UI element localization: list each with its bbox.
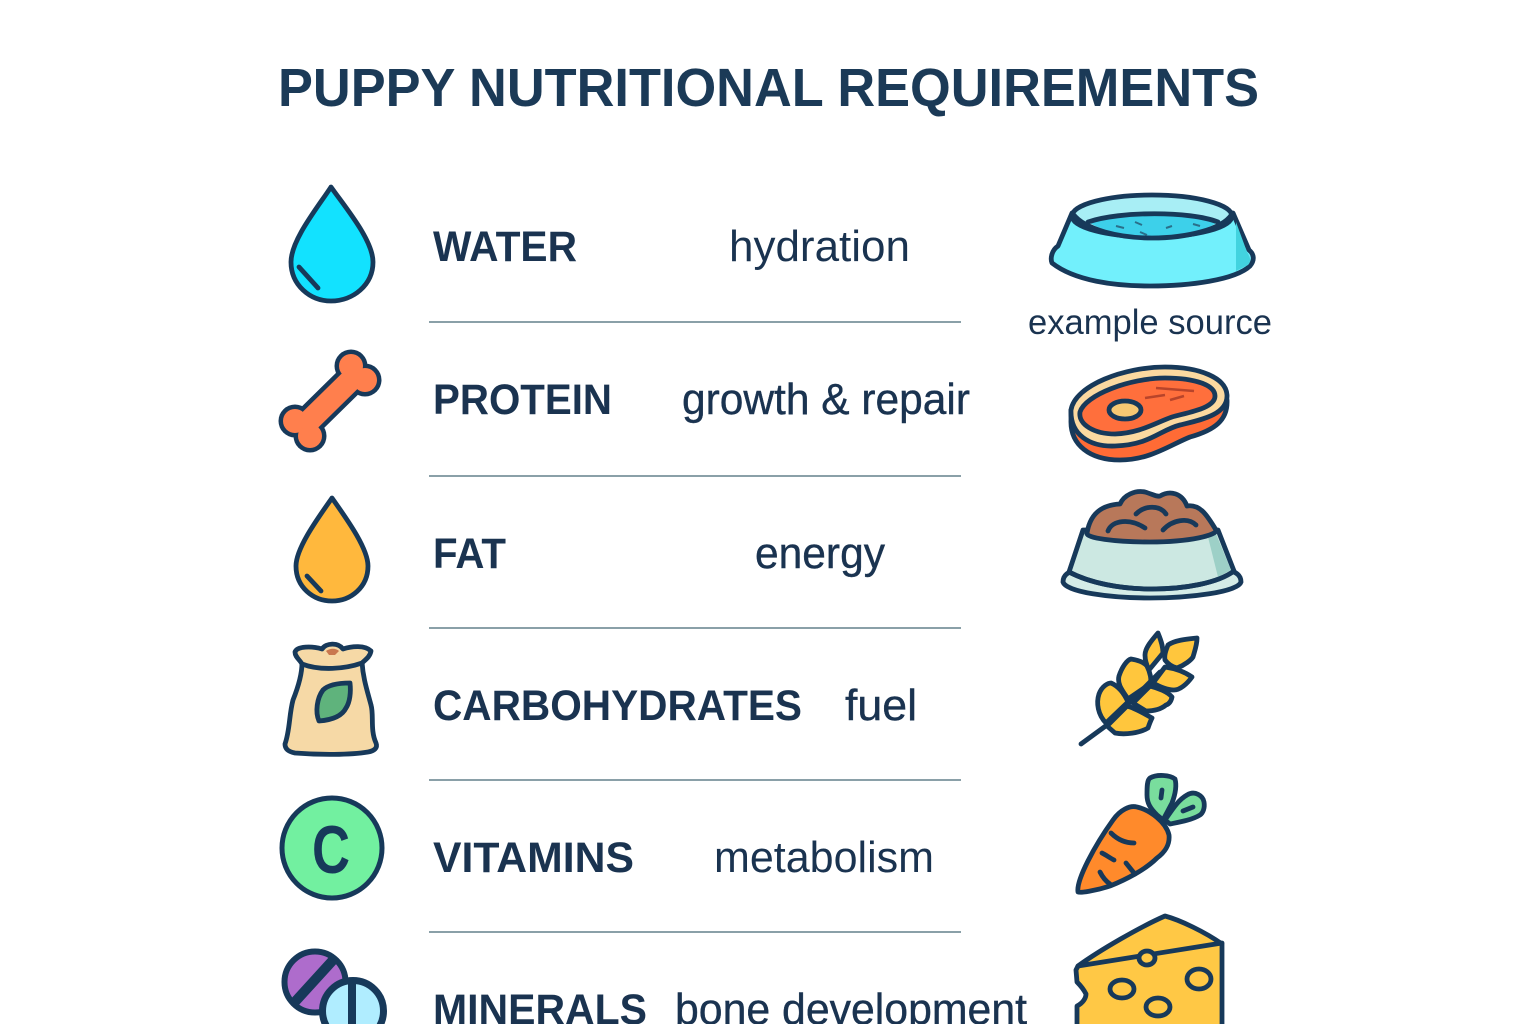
row: minerals	[284, 916, 1222, 1024]
icon: wheat	[1081, 633, 1197, 744]
icon: carrot	[1078, 775, 1204, 892]
label: protein: PROTEIN	[433, 376, 612, 424]
description: hydration: hydration	[729, 222, 910, 271]
row: vitamins	[282, 775, 1204, 898]
description: metabolism: metabolism	[714, 833, 934, 882]
icon: cheese	[1076, 916, 1222, 1024]
label: vitamins: VITAMINS	[433, 834, 634, 882]
icon: kibble bowl	[1063, 492, 1241, 598]
row: fat	[296, 492, 1241, 601]
icon: water drop	[291, 187, 373, 301]
icon: food sack	[285, 644, 377, 754]
icon: fat drop	[296, 498, 368, 601]
row: protein	[278, 350, 1227, 460]
icon: vitamin c badge	[282, 798, 382, 898]
icon: vitamin c badge: C	[312, 812, 350, 888]
icon: bone	[278, 350, 382, 452]
description: fuel: fuel	[845, 681, 917, 730]
row: carbohydrates	[285, 633, 1197, 754]
row: water	[291, 187, 1272, 342]
caption: example source: example source	[1028, 303, 1272, 342]
description: energy: energy	[755, 529, 885, 578]
icon: water bowl	[1051, 195, 1253, 286]
label: carbohydrates: CARBOHYDRATES	[433, 682, 802, 730]
title: PUPPY NUTRITIONAL REQUIREMENTS	[278, 58, 1259, 118]
icon: mineral tablets	[284, 952, 384, 1024]
description: growth and repair: growth & repair	[682, 375, 970, 424]
label: fat: FAT	[433, 530, 506, 578]
label: water: WATER	[433, 223, 577, 271]
icon: steak	[1071, 367, 1227, 460]
